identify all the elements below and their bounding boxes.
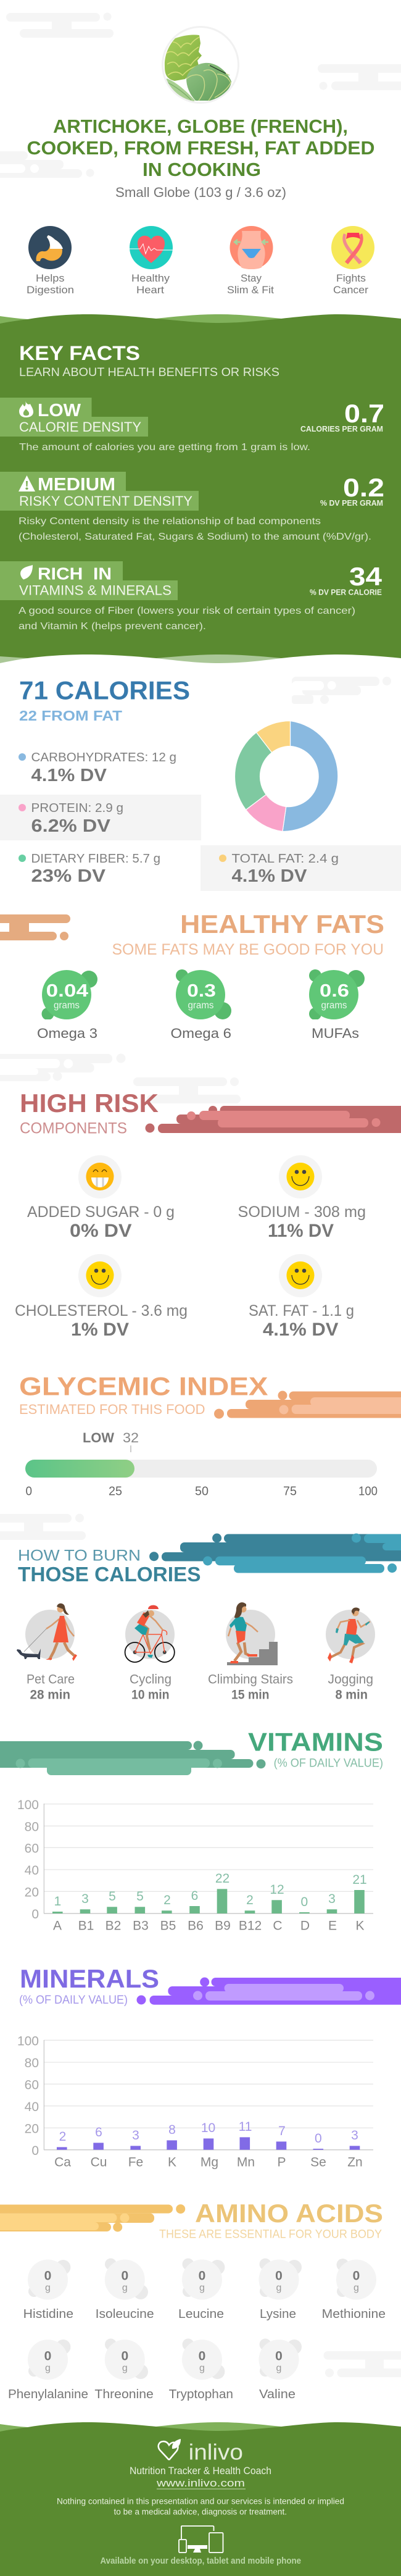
bar chart: vitamins: C: [273, 1919, 283, 1933]
legend: carbohydrates: CARBOHYDRATES: 12 g: [31, 751, 176, 764]
subheading: estimated: ESTIMATED FOR THIS FOOD: [19, 1402, 205, 1417]
icon: leaf: [20, 565, 33, 579]
website link: www.inlivo.com: [156, 2477, 245, 2489]
legend: dietary fiber: 23% DV: [31, 866, 106, 886]
heading: how to burn: HOW TO BURN: [18, 1547, 141, 1565]
bar chart: vitamins: D: [300, 1919, 310, 1933]
heading: those calories: THOSE CALORIES: [18, 1563, 201, 1586]
disclaimer: to be a medical advice, diagnosis or treatment.: [114, 2507, 287, 2517]
activity: pet care: Pet Care: [27, 1672, 75, 1687]
bar chart: minerals: K: [168, 2155, 176, 2169]
fact: medium risky content density: [0, 472, 384, 542]
marker: low 32: 32: [123, 1430, 139, 1445]
gauge scale: 25: [109, 1485, 122, 1499]
amino: histidine: [23, 2260, 73, 2321]
amino: threonine: Threonine: [94, 2388, 154, 2401]
amino: methionine: [322, 2259, 386, 2321]
decoration: red bars: [146, 1106, 401, 1133]
background cloud: behind title: [0, 151, 94, 178]
fact: medium risky content density: RISKY CONTENT DENSITY: [19, 493, 192, 509]
bubble: MUFAs: [309, 969, 365, 1041]
fact: medium risky content density: (Cholesterol, Saturated Fat, Sugars & Sodium) to the amount (%DV/gr).: [19, 532, 371, 542]
item: saturated fat: SAT. FAT - 1.1 g: [249, 1302, 354, 1319]
amino: phenylalanine: [8, 2340, 88, 2401]
fact: rich in vitamins and minerals: A good source of Fiber (lowers your risk of certain types of cancer): [19, 606, 355, 616]
icon: fights cancer: Fights: [336, 272, 366, 284]
legend: total fat: TOTAL FAT: 2.4 g: [232, 852, 339, 866]
bubble: omega 6: [170, 969, 231, 1041]
icon: helps digestion: Digestion: [27, 284, 74, 296]
activity: cycling: 10 min: [131, 1688, 169, 1702]
icon: healthy heart: Healthy: [131, 272, 170, 284]
item: added sugar: 0% DV: [70, 1221, 132, 1241]
legend: total fat: [200, 845, 401, 891]
background cloud: calories: [292, 677, 391, 704]
icon: devices: [179, 2526, 223, 2553]
bubble: MUFAs: grams: [321, 1000, 347, 1011]
donut chart: macronutrients: [235, 721, 338, 832]
activity: climbing stairs: 15 min: [231, 1688, 269, 1702]
amino: threonine: g: [122, 2363, 128, 2373]
fact: low calorie density: CALORIE DENSITY: [19, 419, 141, 435]
decoration: orange bars: [0, 914, 70, 940]
bar chart: minerals: 40: [25, 2100, 39, 2114]
subheading: healthy fats: SOME FATS MAY BE GOOD FOR YOU: [112, 941, 384, 958]
bar chart: vitamins: 5: [136, 1889, 144, 1904]
bubble: omega 3: [37, 970, 97, 1041]
bar chart: vitamins: 2: [163, 1893, 171, 1907]
fact: low calorie density: 0.7: [344, 399, 384, 428]
item: sodium: [238, 1155, 366, 1241]
bar chart: minerals: 100: [17, 2034, 39, 2049]
legend: protein: 6.2% DV: [31, 816, 111, 836]
panel: amino acids: [0, 2199, 386, 2401]
fact: low calorie density: CALORIES PER GRAM: [300, 425, 383, 433]
amino: valine: 0: [275, 2349, 283, 2363]
amino: leucine: Leucine: [178, 2307, 224, 2321]
fact: low calorie density: [0, 398, 384, 453]
bubble: omega 6: 0.3: [187, 981, 216, 1001]
subheading: percent of daily value: (% OF DAILY VALUE): [19, 1993, 128, 2007]
bar chart: minerals: [17, 2034, 373, 2169]
bar chart: vitamins: 0: [31, 1907, 39, 1922]
amino: valine: g: [276, 2363, 281, 2373]
amino: isoleucine: [96, 2259, 154, 2321]
icon: healthy heart: [130, 226, 173, 296]
background cloud: top left: [6, 12, 114, 38]
background cloud: above high risk right: [133, 1077, 241, 1103]
bar chart: vitamins: 60: [25, 1841, 39, 1856]
amino: valine: Valine: [259, 2388, 296, 2401]
bar chart: minerals: 3: [132, 2128, 139, 2143]
decoration: green bars: [0, 1741, 265, 1775]
bar chart: vitamins: A: [53, 1919, 62, 1933]
bubble: MUFAs: MUFAs: [312, 1026, 359, 1041]
icon: stay slim and fit: Slim & Fit: [227, 284, 274, 296]
item: cholesterol: [15, 1254, 188, 1340]
fact: medium risky content density: MEDIUM: [38, 475, 115, 495]
bar chart: vitamins: 3: [328, 1892, 336, 1906]
bar chart: vitamins: 1: [54, 1894, 61, 1909]
amino: tryptophan: Tryptophan: [169, 2388, 233, 2401]
heading: amino acids: AMINO ACIDS: [195, 2199, 383, 2228]
bar chart: minerals: 6: [95, 2125, 102, 2139]
icon: fights cancer: [331, 226, 374, 296]
panel: footer: [0, 2422, 401, 2576]
item: added sugar: [27, 1155, 175, 1241]
title: [27, 115, 375, 180]
icon: warning triangle: [19, 475, 35, 491]
disclaimer: [57, 2496, 344, 2517]
bar chart: vitamins: 3: [81, 1892, 89, 1906]
gauge scale: 50: [195, 1485, 209, 1499]
gauge scale: 0: [26, 1485, 32, 1499]
subheading: components: COMPONENTS: [20, 1120, 127, 1137]
bar chart: minerals: 11: [239, 2120, 252, 2134]
subheading: calories from fat: 22 FROM FAT: [19, 708, 122, 724]
bar chart: vitamins: 21: [352, 1873, 367, 1887]
bar chart: minerals: 10: [201, 2121, 215, 2135]
item: sodium: 11% DV: [268, 1221, 334, 1241]
decoration: yellow bars: [0, 2204, 185, 2231]
activity: cycling: [125, 1605, 175, 1702]
bar chart: vitamins: B3: [133, 1919, 149, 1933]
icon: fights cancer: Cancer: [333, 284, 368, 296]
heading: minerals: MINERALS: [20, 1964, 159, 1993]
disclaimer: Nothing contained in this presentation and our services is intended or implied: [57, 2496, 344, 2506]
legend: total fat: 4.1% DV: [232, 866, 307, 886]
bar chart: minerals: 7: [278, 2124, 286, 2138]
bar chart: minerals: 3: [351, 2128, 358, 2143]
title: IN COOKING: [143, 159, 261, 180]
amino: phenylalanine: g: [45, 2363, 51, 2373]
bubble: MUFAs: 0.6: [320, 981, 349, 1001]
panel: healthy fats: [0, 910, 384, 1041]
bar chart: minerals: Mn: [237, 2155, 255, 2169]
bar chart: vitamins: 5: [109, 1889, 116, 1904]
fact: rich in vitamins and minerals: [0, 561, 382, 632]
decoration: purple bars: [137, 1977, 401, 2005]
logo: inlivo heart and leaf: inlivo: [189, 2439, 243, 2465]
bar chart: vitamins: 40: [25, 1863, 39, 1878]
amino: isoleucine: 0: [121, 2269, 128, 2283]
icon: stay slim and fit: Stay: [241, 272, 262, 284]
title: ARTICHOKE, GLOBE (FRENCH),: [53, 115, 348, 137]
subheading: key facts: LEARN ABOUT HEALTH BENEFITS OR RISKS: [19, 366, 279, 379]
legend: protein: [0, 795, 201, 840]
heading: glycemic index: GLYCEMIC INDEX: [19, 1372, 268, 1400]
amino: tryptophan: g: [199, 2363, 205, 2373]
title: COOKED, FROM FRESH, FAT ADDED: [27, 137, 375, 159]
amino: methionine: 0: [353, 2269, 360, 2283]
activity: climbing stairs: [208, 1602, 293, 1702]
legend: carbohydrates: 4.1% DV: [31, 766, 107, 785]
amino: lysine: [259, 2259, 302, 2321]
bar chart: vitamins: B9: [215, 1919, 231, 1933]
activity: jogging: [326, 1608, 375, 1702]
gauge bar: [25, 1460, 377, 1478]
heading: high risk: HIGH RISK: [20, 1089, 159, 1118]
panel: how to burn those calories: [17, 1534, 401, 1702]
amino: lysine: 0: [275, 2269, 283, 2283]
amino: tryptophan: 0: [199, 2349, 205, 2363]
legend: protein: PROTEIN: 2.9 g: [31, 801, 123, 815]
subheading: amino acids: THESE ARE ESSENTIAL FOR YOUR BODY: [159, 2228, 382, 2241]
amino: histidine: Histidine: [23, 2307, 73, 2321]
bar chart: vitamins: B12: [239, 1919, 262, 1933]
fact: medium risky content density: 0.2: [343, 473, 384, 502]
bar chart: minerals: 0: [315, 2131, 322, 2146]
legend: dietary fiber: [19, 852, 160, 886]
fact: rich in vitamins and minerals: VITAMINS & MINERALS: [19, 583, 172, 598]
food photo: artichoke in a ring: [163, 27, 238, 105]
activity: pet care: [17, 1604, 77, 1702]
bar chart: vitamins: [17, 1798, 373, 1933]
amino: threonine: 0: [121, 2349, 128, 2363]
decoration: orange bars: [214, 1390, 401, 1419]
bar chart: minerals: P: [277, 2155, 286, 2169]
gauge scale: [26, 1485, 378, 1499]
bar chart: vitamins: B1: [78, 1919, 94, 1933]
amino: methionine: g: [353, 2283, 359, 2293]
legend: dietary fiber: DIETARY FIBER: 5.7 g: [31, 852, 160, 866]
legend: carbohydrates: [19, 751, 176, 785]
bar chart: minerals: Cu: [91, 2155, 107, 2169]
bar chart: vitamins: 0: [301, 1895, 308, 1909]
panel: glycemic index: [19, 1372, 401, 1499]
bar chart: minerals: Ca: [54, 2155, 71, 2169]
bar chart: minerals: 20: [25, 2122, 39, 2136]
amino: valine: [259, 2339, 302, 2401]
amino: isoleucine: g: [122, 2283, 128, 2293]
panel: high risk components: [15, 1089, 401, 1340]
bar chart: vitamins: 12: [270, 1883, 284, 1897]
panel: key facts: [0, 314, 401, 663]
bubble: omega 3: Omega 3: [37, 1026, 97, 1041]
item: saturated fat: [249, 1254, 354, 1340]
bubble: omega 3: grams: [54, 1000, 80, 1011]
amino: tryptophan: [169, 2339, 233, 2401]
bar chart: minerals: 60: [25, 2078, 39, 2092]
subheading: percent of daily value: (% OF DAILY VALUE): [274, 1757, 383, 1770]
amino: threonine: [94, 2339, 154, 2401]
bar chart: vitamins: 22: [215, 1871, 229, 1886]
icon: helps digestion: [27, 226, 74, 296]
serving size: Small Globe (103 g / 3.6 oz): [115, 185, 286, 200]
fact: rich in vitamins and minerals: 34: [349, 562, 382, 591]
bar chart: minerals: 2: [59, 2130, 66, 2144]
bubble: omega 6: Omega 6: [170, 1026, 231, 1041]
heading: vitamins: VITAMINS: [248, 1728, 383, 1757]
bar chart: vitamins: B5: [160, 1919, 176, 1933]
amino: lysine: Lysine: [260, 2307, 296, 2321]
heading: calories: 71 CALORIES: [19, 675, 190, 705]
amino: leucine: 0: [199, 2269, 205, 2283]
bar chart: vitamins: 2: [246, 1893, 254, 1907]
activity: pet care: 28 min: [30, 1688, 70, 1702]
background cloud: above burn: [0, 1514, 86, 1540]
fact: medium risky content density: Risky Content density is the relationship of bad components: [19, 516, 321, 527]
bar chart: vitamins: B6: [188, 1919, 204, 1933]
activity: jogging: Jogging: [328, 1672, 373, 1687]
fact: low calorie density: LOW: [38, 401, 81, 420]
fact: rich in vitamins and minerals: and Vitamin K (helps prevent cancer).: [19, 621, 206, 632]
activity: cycling: Cycling: [130, 1672, 172, 1687]
amino: phenylalanine: Phenylalanine: [8, 2388, 88, 2401]
bubble: omega 3: 0.04: [46, 981, 88, 1001]
fact: medium risky content density: % DV PER GRAM: [320, 499, 383, 508]
bar chart: vitamins: B2: [105, 1919, 121, 1933]
marker: low 32: [83, 1430, 139, 1452]
bar chart: vitamins: E: [328, 1919, 337, 1933]
panel: vitamins: [0, 1728, 383, 1933]
gauge scale: 100: [358, 1485, 378, 1499]
item: sodium: SODIUM - 308 mg: [238, 1203, 366, 1221]
icon: stay slim and fit: [227, 226, 274, 296]
icon: helps digestion: Helps: [36, 272, 64, 284]
amino: methionine: Methionine: [322, 2307, 386, 2321]
panel: calories: [0, 675, 401, 891]
activity: climbing stairs: Climbing Stairs: [208, 1672, 293, 1687]
item: cholesterol: CHOLESTEROL - 3.6 mg: [15, 1302, 188, 1319]
logo: inlivo heart and leaf: [159, 2439, 243, 2465]
fact: low calorie density: The amount of calories you are getting from 1 gram is low.: [19, 442, 310, 453]
item: cholesterol: 1% DV: [71, 1319, 129, 1340]
bar chart: minerals: 0: [31, 2144, 39, 2158]
icon: flame: [19, 401, 33, 417]
marker: low 32: LOW: [83, 1430, 114, 1445]
decoration: teal bars: [149, 1534, 401, 1573]
bar chart: vitamins: 100: [17, 1798, 39, 1812]
bar chart: vitamins: 80: [25, 1820, 39, 1834]
amino: histidine: g: [45, 2283, 51, 2293]
amino: isoleucine: Isoleucine: [96, 2307, 154, 2321]
heading: healthy fats: HEALTHY FATS: [180, 910, 384, 939]
bar chart: minerals: Se: [310, 2155, 326, 2169]
bar chart: minerals: 80: [25, 2056, 39, 2070]
tagline: Nutrition Tracker & Health Coach: [130, 2465, 271, 2477]
amino: lysine: g: [276, 2283, 281, 2293]
heading: key facts: KEY FACTS: [19, 342, 140, 364]
gauge scale: 75: [283, 1485, 297, 1499]
amino: leucine: [178, 2259, 225, 2321]
bubble: omega 6: grams: [188, 1000, 214, 1011]
amino: phenylalanine: 0: [44, 2349, 51, 2363]
fact: rich in vitamins and minerals: RICH IN: [38, 564, 112, 583]
amino: histidine: 0: [44, 2269, 51, 2283]
item: saturated fat: 4.1% DV: [263, 1319, 338, 1340]
panel: minerals: [17, 1964, 401, 2169]
bar chart: minerals: 8: [168, 2123, 176, 2137]
item: added sugar: ADDED SUGAR - 0 g: [27, 1203, 175, 1221]
activity: jogging: 8 min: [336, 1688, 368, 1702]
icon: healthy heart: Heart: [136, 284, 164, 296]
bar chart: vitamins: 6: [191, 1889, 198, 1903]
bar chart: vitamins: K: [355, 1919, 365, 1933]
amino: leucine: g: [199, 2283, 205, 2293]
bar chart: minerals: Zn: [347, 2155, 363, 2169]
bar chart: minerals: Fe: [128, 2155, 143, 2169]
bar chart: minerals: Mg: [200, 2155, 218, 2169]
background cloud: above high risk left: [0, 1053, 126, 1081]
bar chart: vitamins: 20: [25, 1886, 39, 1899]
background cloud: top right: [318, 64, 401, 90]
fact: rich in vitamins and minerals: % DV PER CALORIE: [310, 588, 382, 596]
availability note: Available on your desktop, tablet and mobile phone: [100, 2556, 301, 2566]
background cloud: beside amino acids: [323, 2351, 401, 2377]
